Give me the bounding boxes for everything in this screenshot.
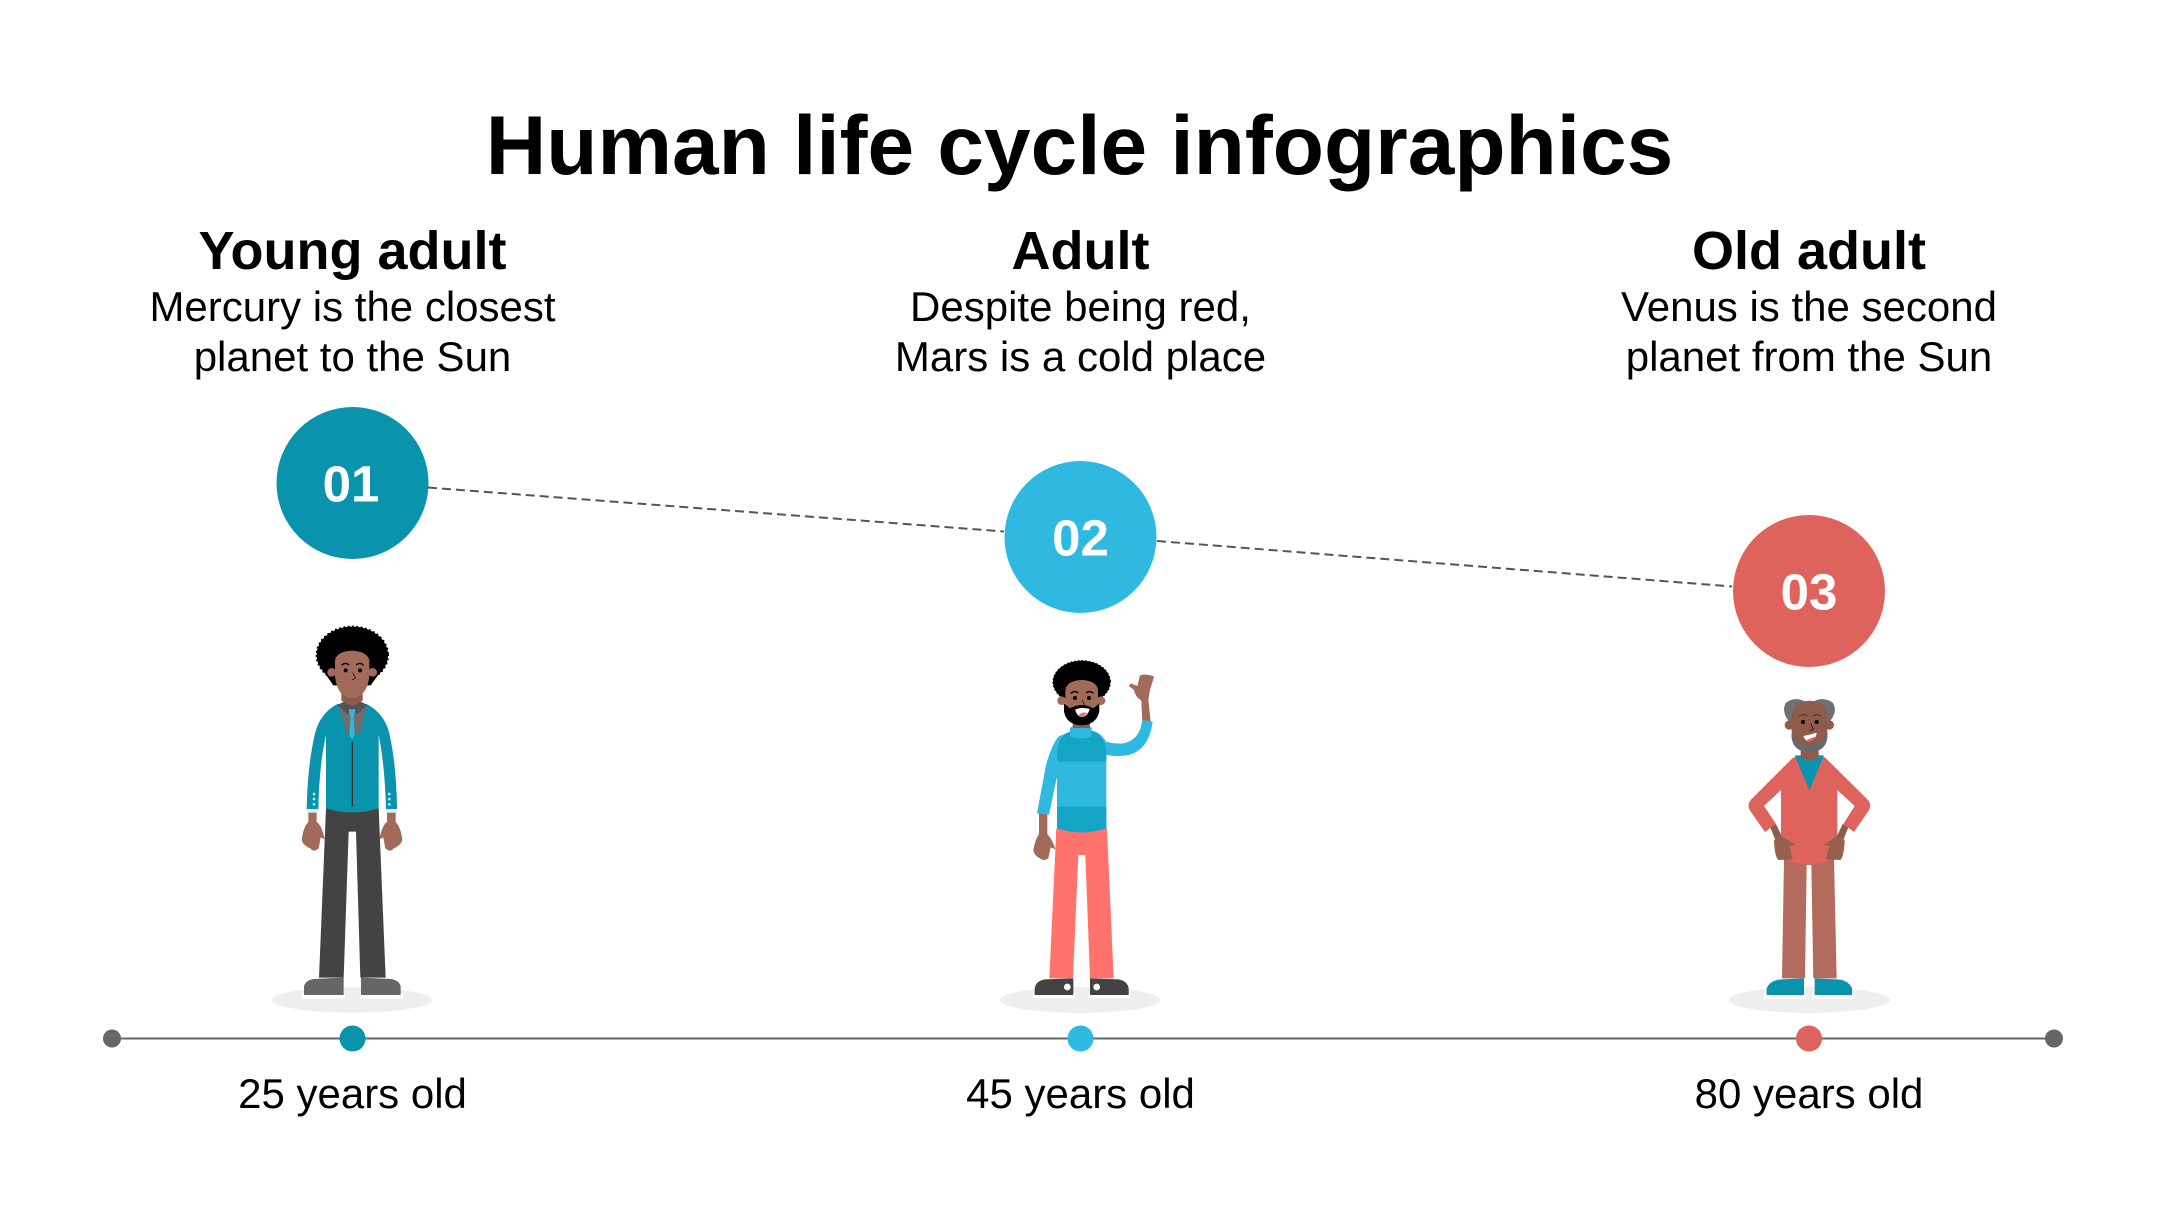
title: Human life cycle infographics [486,98,1673,192]
text: old adult description: Venus is the second [1621,282,1997,330]
badge 02 [1004,461,1156,613]
figure: young adult [272,627,432,1013]
text: old adult description: planet from the Sun [1626,332,1992,380]
text: adult description: Mars is a cold place [895,332,1266,380]
heading: adult: Adult [1012,221,1149,281]
figure: old adult [1729,699,1890,1013]
dashed connector 2 [1157,541,1732,586]
badge 03 [1733,515,1885,667]
text: young adult description: planet to the Sun [194,332,511,380]
heading: young adult: Young adult [199,221,506,281]
badge 03: 03 [1781,564,1837,620]
timeline [103,1026,2063,1052]
dashed connector 1 [428,488,1004,532]
label: 80 years old: 80 years old [1695,1070,1923,1116]
badge 02: 02 [1052,510,1109,566]
text: adult description [895,282,1266,380]
badge 01 [276,407,428,559]
text: young adult description: Mercury is the closest [149,282,556,330]
figure: adult [1000,661,1160,1013]
label: 45 years old: 45 years old [966,1070,1195,1116]
heading: old adult: Old adult [1692,221,1926,281]
badge 01: 01 [323,456,379,512]
label: 25 years old: 25 years old [238,1070,467,1116]
text: young adult description [149,282,556,380]
text: adult description: Despite being red, [910,282,1251,330]
text: old adult description [1621,282,1997,380]
